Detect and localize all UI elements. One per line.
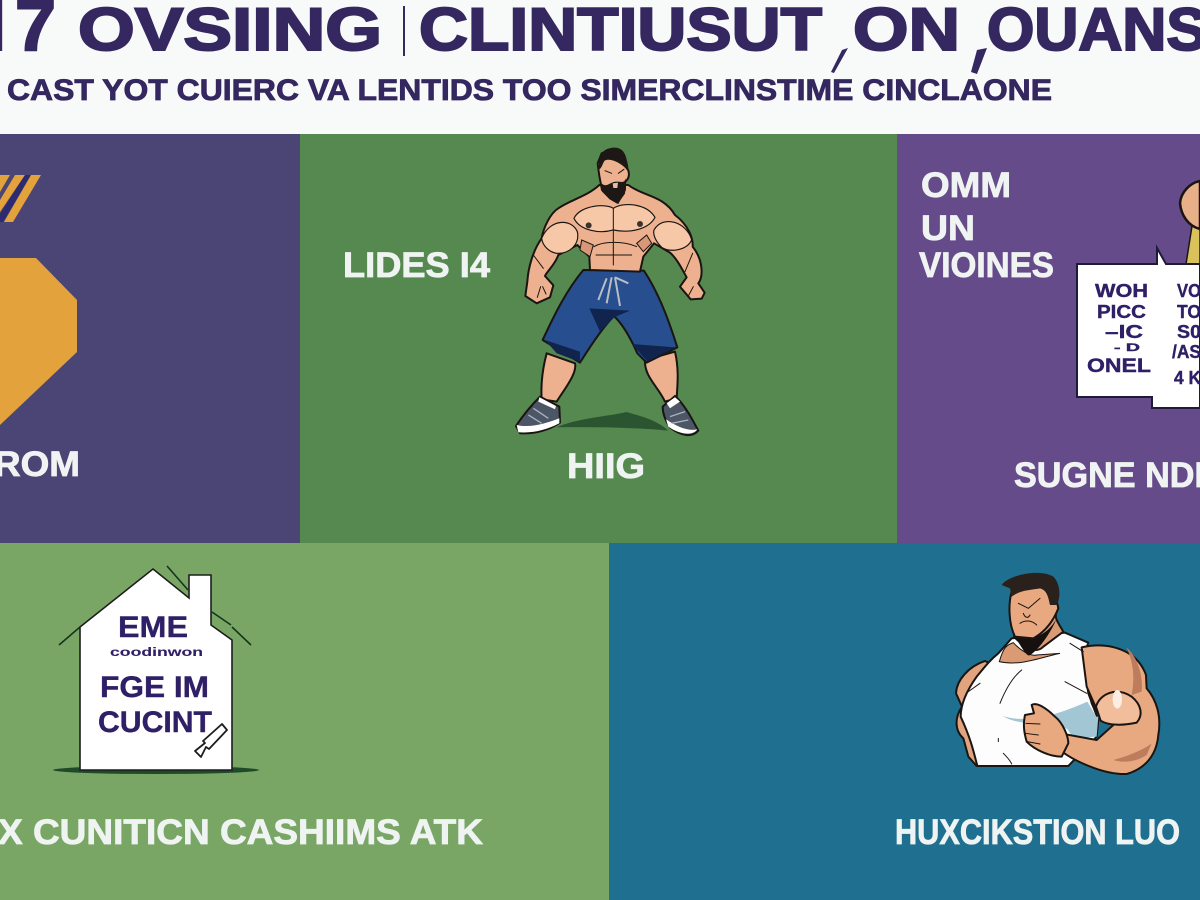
label: OMM UN VIOINES: UN (921, 209, 975, 248)
house text (98, 611, 212, 739)
panel: bottom right (609, 543, 1200, 900)
bubble text left (1087, 281, 1151, 377)
bubble text left: ONEL (1087, 356, 1151, 377)
panel: top right (897, 134, 1200, 543)
house text: CUCINT (98, 706, 212, 739)
house text: EME (118, 611, 188, 644)
speech bubbles (1077, 248, 1200, 408)
right shoe (663, 396, 698, 435)
bubble text left: PICC (1097, 302, 1146, 322)
header background (0, 0, 1200, 134)
label: HIIG: HIIG (567, 447, 645, 486)
upper body (525, 185, 705, 303)
neck and collar (1014, 615, 1063, 650)
label: X CUNITICN CASHIIMS ATK: X CUNITICN CASHIIMS ATK (0, 813, 483, 852)
fist (1024, 704, 1068, 757)
figure: cropped man (1180, 181, 1200, 264)
bubble text left: –IC (1105, 322, 1143, 342)
label: OMM UN VIOINES: VIOINES (919, 246, 1054, 285)
icon: yellow slashes (0, 175, 41, 222)
left leg (541, 353, 575, 402)
right arm (1060, 645, 1159, 774)
vest (961, 633, 1098, 766)
panel: bottom left (0, 543, 609, 900)
icon: orange octagon (0, 258, 77, 425)
house text: coodinwon (110, 645, 203, 659)
left arm (956, 661, 997, 766)
label: OMM UN VIOINES: OMM (921, 166, 1011, 205)
bubble text left: WOH (1095, 281, 1148, 301)
bubble text right: S0 (1177, 322, 1200, 342)
figure: muscular man in white vest (956, 573, 1159, 774)
figure: muscular man standing (516, 148, 705, 435)
subtitle: CAST YOT CUIERC VA LENTIDS TOO SIMERCLINSTIME CINCLAONE (7, 74, 1052, 107)
panel: top left (0, 134, 300, 543)
title (0, 0, 1200, 74)
pants (543, 270, 677, 363)
label: OMM UN VIOINES (919, 166, 1054, 285)
icon: hammer (195, 724, 227, 757)
head (598, 151, 629, 203)
label: LIDES I4: LIDES I4 (343, 246, 491, 285)
head (1009, 585, 1058, 638)
left shoe (516, 397, 560, 433)
icon: house sign (53, 566, 259, 774)
right leg (645, 352, 678, 402)
panel: top centre (300, 134, 897, 543)
bubble text left: - D (1114, 342, 1140, 354)
house text: FGE IM (100, 671, 209, 704)
chest and biceps (542, 205, 692, 253)
bubble text right (1172, 281, 1200, 388)
